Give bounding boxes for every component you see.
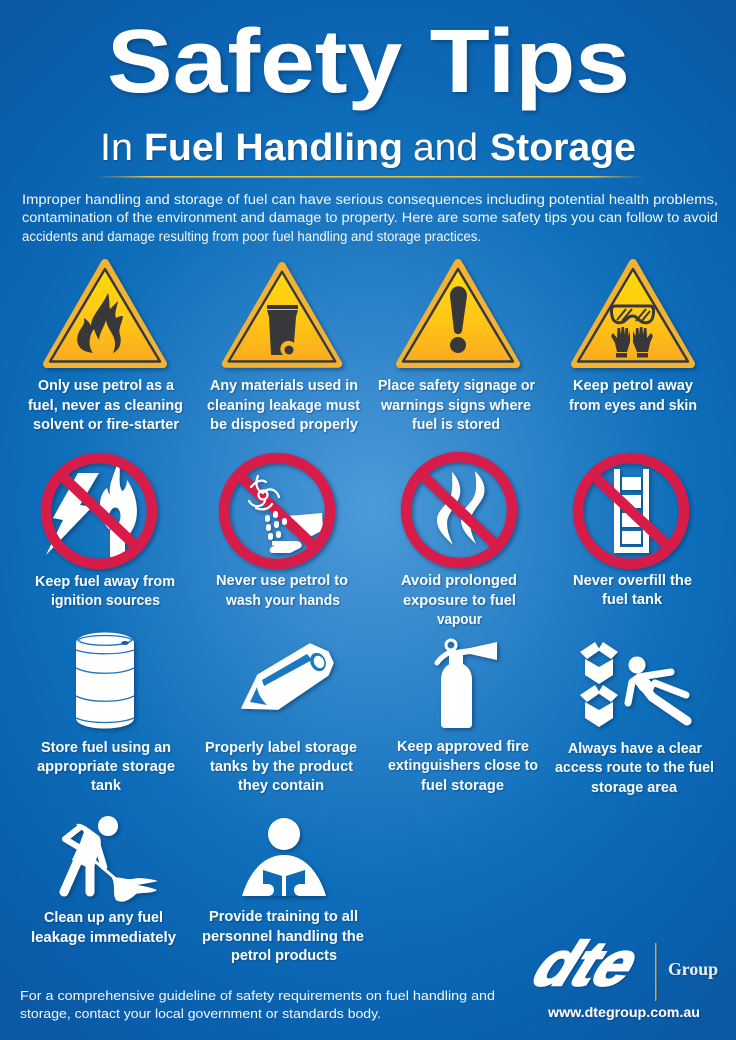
icon: no hand washing with petrol [224, 458, 330, 564]
tips row 2: Never overfill the [573, 573, 692, 589]
tips row 3: tanks by the product [210, 759, 353, 775]
tips row 3: appropriate storage [37, 759, 175, 775]
tips row 3: Store fuel using an [41, 740, 171, 756]
icon: label pencil [242, 644, 333, 709]
tips row 3: storage area [591, 780, 678, 796]
icon: do not overfill tank [578, 458, 684, 564]
icon: no fuel vapour [406, 457, 512, 563]
tips row 2: wash your hands [225, 593, 340, 609]
tips row 1: Place safety signage or [378, 378, 535, 394]
tips row 1 [28, 378, 697, 433]
tips row 3: tank [91, 778, 122, 794]
tips row 1: cleaning leakage must [207, 398, 360, 414]
tips row 2 [35, 573, 692, 628]
tips row 2: exposure to fuel [403, 593, 516, 609]
subtitle: and [413, 127, 478, 169]
tips row 1: Only use petrol as a [38, 378, 175, 394]
subtitle: Storage [490, 127, 636, 169]
tips row 3 [37, 739, 714, 796]
logo: dte group: dte [518, 930, 655, 999]
tips row 4: Provide training to all [209, 909, 358, 925]
icon: no ignition sources [46, 458, 152, 564]
icon: fire extinguisher [437, 640, 497, 728]
footer note [20, 988, 495, 1021]
tips row 3: Always have a clear [568, 741, 702, 757]
tips row 1: Keep petrol away [573, 378, 693, 394]
footer note: storage, contact your local government or standards body. [20, 1006, 381, 1021]
intro text: Improper handling and storage of fuel can have serious consequences including potential health problems, [22, 192, 718, 207]
tips row 3: extinguishers close to [388, 758, 538, 774]
logo: dte group [518, 930, 718, 1020]
tips row 3: Keep approved fire [397, 739, 529, 755]
tips row 2: ignition sources [51, 593, 160, 609]
intro text [22, 192, 718, 244]
icon: exclamation warning [400, 263, 516, 364]
subtitle: Fuel Handling [144, 127, 403, 169]
tips row 2: Never use petrol to [216, 573, 348, 589]
tips row 3: fuel storage [421, 778, 504, 794]
tips row 2: fuel tank [602, 592, 663, 608]
tips row 4: petrol products [231, 948, 337, 964]
intro text: accidents and damage resulting from poor fuel handling and storage practices. [22, 229, 481, 244]
title: Safety Tips [107, 12, 630, 112]
tips row 3: access route to the fuel [555, 760, 714, 776]
tips row 1: solvent or fire-starter [33, 417, 179, 433]
tips row 4: Clean up any fuel [44, 910, 163, 926]
tips row 1: fuel is stored [412, 417, 500, 433]
logo: dte group: www.dtegroup.com.au [547, 1005, 700, 1020]
icon: fuel drum [76, 632, 134, 728]
subtitle: In [100, 127, 133, 169]
tips row 1: Any materials used in [210, 378, 358, 394]
tips row 4: personnel handling the [202, 929, 364, 945]
icon: waste bin warning [226, 266, 338, 364]
icon: worker cleaning spill [64, 816, 158, 902]
tips row 2: vapour [437, 612, 482, 628]
icon: flame warning [47, 263, 163, 364]
tips row 4 [31, 909, 364, 964]
subtitle [100, 127, 636, 169]
footer note: For a comprehensive guideline of safety requirements on fuel handling and [20, 988, 495, 1003]
tips row 2: Keep fuel away from [35, 574, 175, 590]
tips row 3: they contain [238, 778, 324, 794]
tips row 1: warnings signs where [380, 398, 531, 414]
tips row 4: leakage immediately [31, 930, 176, 946]
tips row 1: from eyes and skin [569, 398, 697, 414]
tips row 1: fuel, never as cleaning [28, 398, 183, 414]
icon: training person with book [242, 818, 326, 896]
icon: boxes and falling person [580, 642, 687, 727]
tips row 3: Properly label storage [205, 740, 357, 756]
tips row 2: Avoid prolonged [401, 573, 517, 589]
logo: dte group: Group [668, 959, 718, 979]
icon: goggles and gloves warning [575, 263, 691, 364]
intro text: contamination of the environment and damage to property. Here are some safety tips you can follow to avoid [22, 210, 718, 225]
tips row 1: be disposed properly [210, 417, 358, 433]
